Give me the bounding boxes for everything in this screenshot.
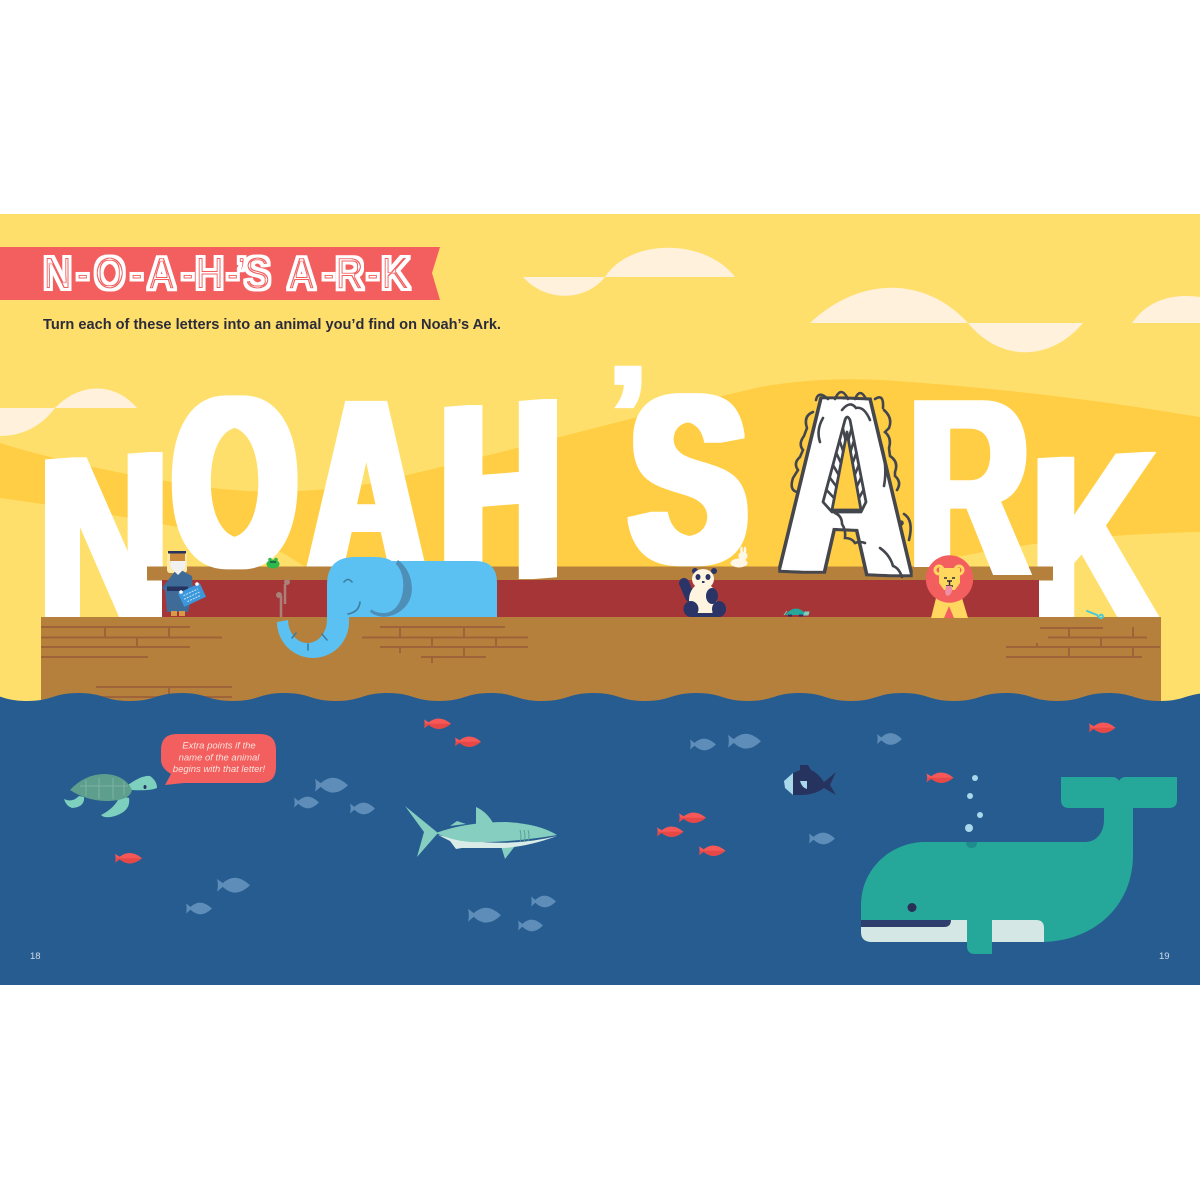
frog	[266, 558, 280, 568]
panda face	[696, 574, 710, 583]
big letter A: A	[307, 345, 425, 632]
lion chest	[944, 606, 954, 618]
whale body	[861, 800, 1133, 942]
big letter O: O	[173, 349, 296, 617]
red fish	[115, 719, 1116, 863]
cloud right	[810, 288, 1083, 352]
shark belly	[438, 835, 557, 849]
feet	[166, 612, 190, 617]
brick lines	[41, 627, 1160, 697]
beard	[170, 561, 186, 575]
big letter S: S	[630, 347, 747, 613]
panda legs	[684, 601, 726, 617]
dark fish face	[784, 773, 793, 795]
banner title: N-O-A-H-’S A-R-K	[43, 249, 410, 300]
elephant	[276, 557, 497, 658]
hood	[167, 551, 187, 573]
callout text: Extra points if the	[182, 740, 256, 752]
turtle eye	[144, 785, 146, 789]
big letter R: R	[909, 345, 1030, 629]
turtle shell lines	[80, 778, 128, 799]
Noah figure	[162, 551, 206, 617]
lion features	[944, 578, 955, 586]
ocean	[0, 693, 1200, 985]
elephant trunk	[277, 617, 349, 658]
crocodile letter A	[778, 390, 913, 578]
panda body	[689, 583, 717, 617]
cloud far right	[1132, 296, 1200, 323]
big letter N: N	[39, 399, 169, 678]
crocodile rib band	[823, 417, 866, 512]
headband and belt	[167, 551, 188, 591]
crocodile ribs and scutes	[792, 392, 911, 577]
water spray pipes	[276, 579, 290, 617]
face	[170, 553, 185, 563]
big letter K: K	[1032, 398, 1156, 678]
turtle head	[128, 776, 157, 790]
robe	[162, 570, 193, 612]
instruction text: Turn each of these letters into an animal you’d find on Noah’s Ark.	[43, 316, 501, 333]
banner	[0, 247, 440, 300]
callout text: name of the animal	[179, 752, 260, 764]
panda ears	[692, 568, 717, 574]
dark fish fin	[800, 781, 807, 789]
sign pins	[179, 582, 199, 594]
lizard	[1087, 611, 1103, 618]
lion body	[931, 598, 968, 618]
whale mouth	[861, 920, 951, 927]
whale bubbles	[965, 775, 983, 832]
elephant face lines	[292, 580, 360, 650]
lion mane	[926, 555, 973, 603]
sea turtle	[64, 774, 157, 817]
shark gills	[520, 830, 529, 842]
tortoise	[784, 608, 809, 616]
apostrophe: ’	[607, 333, 649, 501]
sign	[178, 583, 206, 607]
rabbit	[730, 546, 748, 568]
elephant body	[349, 561, 497, 617]
ark hull	[41, 617, 1161, 707]
shark	[405, 806, 557, 859]
whale flipper	[967, 920, 992, 954]
whale belly	[861, 920, 1044, 942]
elephant head	[327, 557, 403, 617]
big letter H: H	[440, 343, 561, 642]
turtle shell	[70, 774, 132, 801]
shark body	[436, 822, 557, 842]
sky background	[0, 214, 1200, 701]
dark fish	[784, 765, 836, 795]
whale	[861, 775, 1177, 954]
panda head	[692, 569, 714, 589]
sand hills	[0, 379, 1200, 570]
whale eye	[908, 903, 916, 912]
callout	[161, 734, 276, 785]
lion ears	[934, 564, 964, 576]
cloud left	[0, 388, 137, 436]
pale blue fish school	[186, 733, 902, 931]
shark fins	[405, 806, 515, 859]
panda	[684, 568, 726, 617]
panda other arm	[706, 588, 718, 604]
whale tail	[1061, 777, 1177, 808]
page number 18: 18	[30, 951, 41, 962]
callout bubble	[161, 734, 276, 785]
callout text: begins with that letter!	[173, 764, 266, 775]
lion	[926, 555, 973, 618]
lion face	[939, 568, 960, 590]
page number 19: 19	[1159, 951, 1170, 962]
crocodile mouth opening	[832, 432, 861, 510]
crocodile eye	[900, 520, 904, 526]
ark top rail	[147, 566, 1053, 580]
panda arm raised	[684, 583, 698, 597]
whale blowhole	[966, 842, 977, 848]
turtle flippers	[64, 796, 129, 817]
elephant ear shadow	[370, 560, 412, 617]
infographic spread	[0, 214, 1200, 985]
cloud top middle	[523, 248, 735, 296]
crocodile letter A: A	[786, 343, 905, 627]
lion tongue	[945, 586, 952, 596]
ark red wall	[162, 580, 1039, 618]
